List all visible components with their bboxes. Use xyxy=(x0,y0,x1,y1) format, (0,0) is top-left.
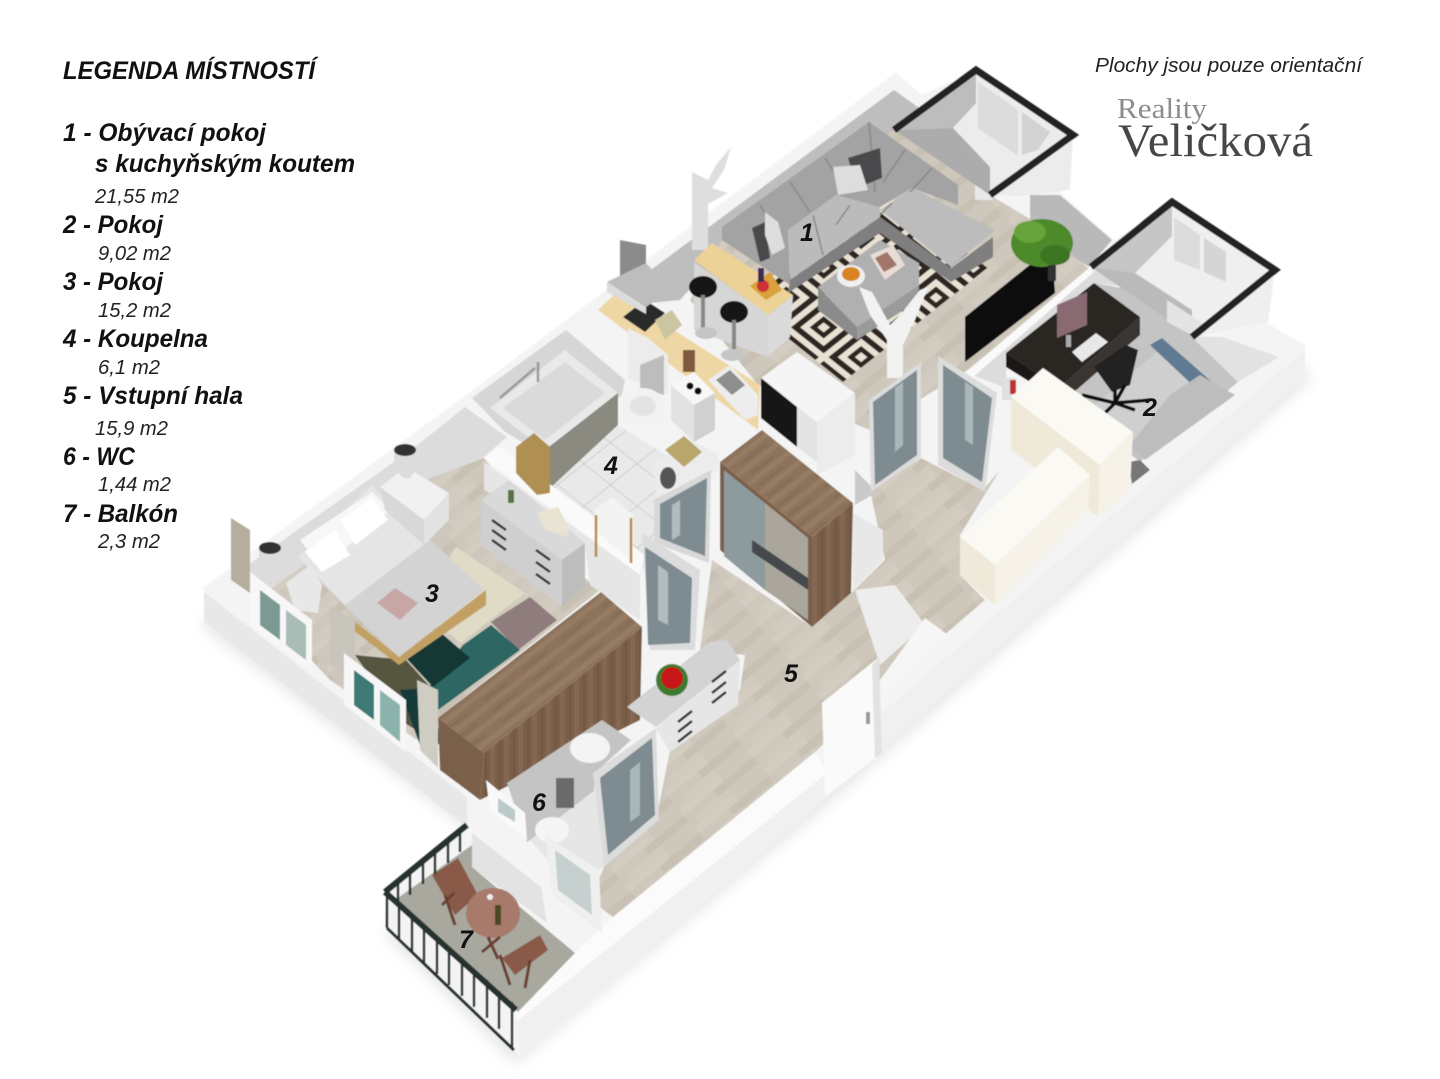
small fridge with hob xyxy=(671,372,715,442)
bag xyxy=(683,350,695,372)
lamp xyxy=(394,448,417,478)
floor xyxy=(690,128,1090,430)
nightstand left xyxy=(259,542,322,613)
flowers xyxy=(656,664,688,696)
TV xyxy=(965,247,1055,362)
legend list: 2,3 m2 xyxy=(97,531,160,553)
bedroom door xyxy=(642,533,700,650)
back wall xyxy=(608,90,922,303)
folded towel xyxy=(377,588,418,620)
office chair xyxy=(1082,345,1150,418)
legend list: 9,02 m2 xyxy=(98,243,171,265)
railing xyxy=(385,825,516,1050)
cream cabinet upper xyxy=(1011,368,1133,517)
back wall xyxy=(231,407,507,610)
basket xyxy=(655,310,682,340)
toilet xyxy=(535,817,569,843)
left seat xyxy=(788,195,880,280)
legend list xyxy=(62,119,355,553)
tiled floor xyxy=(548,425,690,575)
side wall xyxy=(472,833,547,923)
floor xyxy=(395,845,575,1012)
fruit bowl xyxy=(837,265,865,287)
patterned rug xyxy=(740,190,988,382)
bathtub xyxy=(490,350,618,450)
seam lines xyxy=(760,122,932,255)
room 5: entrance hall floor xyxy=(590,458,1000,917)
coat rack xyxy=(692,147,731,250)
cushions xyxy=(848,148,882,188)
balcony door xyxy=(545,835,602,933)
dark corner xyxy=(1128,460,1150,484)
chairs xyxy=(432,858,548,988)
company logo xyxy=(1117,93,1313,167)
washing machine xyxy=(654,440,718,495)
legend list: 6 - WC xyxy=(63,443,136,471)
interior dividing wall with TV xyxy=(965,247,1094,378)
drop shadow xyxy=(200,360,1310,1064)
small window xyxy=(486,780,527,840)
room numbers: 3 xyxy=(425,580,439,608)
room numbers xyxy=(425,219,1157,954)
plant xyxy=(1011,219,1073,281)
sink xyxy=(708,365,758,420)
bedroom wardrobe xyxy=(438,592,642,800)
room 1: living room floor and walls xyxy=(608,90,1112,430)
bedroom dresser xyxy=(481,480,585,607)
kitchen counter xyxy=(598,293,760,430)
cream cabinet lower xyxy=(960,447,1090,605)
rug xyxy=(1095,345,1215,452)
legend list: 1,44 m2 xyxy=(98,474,171,496)
legend list: 3 - Pokoj xyxy=(63,268,164,296)
small plant xyxy=(508,490,514,503)
towel rack xyxy=(594,497,633,563)
window recess 1 xyxy=(894,70,1073,196)
desk xyxy=(1006,283,1140,405)
company logo: Veličková xyxy=(1118,115,1313,167)
legend list: 6,1 m2 xyxy=(98,357,160,379)
sofa xyxy=(722,122,995,293)
floor plan model xyxy=(200,70,1310,1064)
rugs xyxy=(420,547,525,643)
balcony windows of bedroom xyxy=(250,572,406,752)
right wall xyxy=(1030,195,1112,267)
curtains xyxy=(231,518,438,768)
bed xyxy=(298,485,486,665)
room 4: bathroom xyxy=(472,330,718,575)
room numbers: 5 xyxy=(784,660,799,688)
legend list: 7 - Balkón xyxy=(63,500,178,528)
floor xyxy=(255,458,600,740)
room numbers: 4 xyxy=(603,452,618,480)
company logo: Reality xyxy=(1117,93,1208,125)
keyboard xyxy=(1072,333,1108,362)
room numbers: 1 xyxy=(800,219,814,247)
back cushions xyxy=(722,122,958,285)
lamp xyxy=(259,545,282,577)
legend list: 5 - Vstupní hala xyxy=(63,382,243,410)
bar counter xyxy=(694,243,793,357)
back wall xyxy=(472,330,625,455)
monitor xyxy=(1057,292,1087,338)
legend list: 15,9 m2 xyxy=(95,418,168,440)
outer wall faces xyxy=(204,350,1305,1058)
basin xyxy=(621,388,665,426)
bathroom wood cabinet xyxy=(516,433,550,495)
radiator xyxy=(975,168,993,200)
room 3: bedroom xyxy=(231,407,600,745)
hall wardrobe xyxy=(720,430,853,627)
coffee table xyxy=(818,240,919,340)
table xyxy=(466,888,520,938)
entrance door xyxy=(822,657,882,797)
legend list: 4 - Koupelna xyxy=(62,325,208,353)
pillows xyxy=(300,492,390,568)
room numbers: 6 xyxy=(532,789,547,817)
room 7: balcony xyxy=(385,825,602,1050)
wall between bedroom and bathroom xyxy=(484,447,645,620)
room numbers: 7 xyxy=(459,926,474,954)
room numbers: 2 xyxy=(1142,394,1157,422)
kitchen hood xyxy=(607,240,671,314)
legend list: 2 - Pokoj xyxy=(62,211,164,239)
hall wall blocks xyxy=(853,470,948,700)
magazines xyxy=(870,245,905,280)
office door right xyxy=(938,356,997,492)
legend list: 15,2 m2 xyxy=(98,300,171,322)
window recess 2 xyxy=(1091,202,1275,340)
tall fridge xyxy=(761,352,855,475)
legend list: s kuchyňským koutem xyxy=(95,150,355,178)
WC door xyxy=(593,728,659,867)
kitchen partition wall xyxy=(628,328,668,395)
red shelf items xyxy=(1002,378,1016,400)
basin xyxy=(570,733,610,763)
white column xyxy=(859,287,928,378)
books xyxy=(537,507,568,537)
chaise xyxy=(880,188,995,267)
building outer walls xyxy=(204,70,1305,1058)
room 6: WC xyxy=(486,720,659,885)
back walls xyxy=(972,270,1121,388)
laundry basket xyxy=(665,436,702,467)
radiator xyxy=(1167,300,1201,340)
bar stools xyxy=(689,276,748,361)
room 2: office xyxy=(972,202,1279,484)
office door left xyxy=(869,362,921,492)
hall dresser xyxy=(627,640,740,752)
waste bin xyxy=(556,778,574,808)
shower bar xyxy=(500,362,538,398)
nightstand right xyxy=(380,444,449,545)
bathroom door xyxy=(654,470,711,563)
fruit basket xyxy=(750,272,782,300)
disclaimer note: Plochy jsou pouze orientační xyxy=(1095,55,1365,77)
hob xyxy=(623,300,665,332)
floor xyxy=(1006,283,1238,462)
base and front faces xyxy=(788,217,993,293)
legend list: 1 - Obývací pokoj xyxy=(63,119,267,147)
legend list: 21,55 m2 xyxy=(94,186,179,208)
legend title: LEGENDA MÍSTNOSTÍ xyxy=(63,56,319,85)
